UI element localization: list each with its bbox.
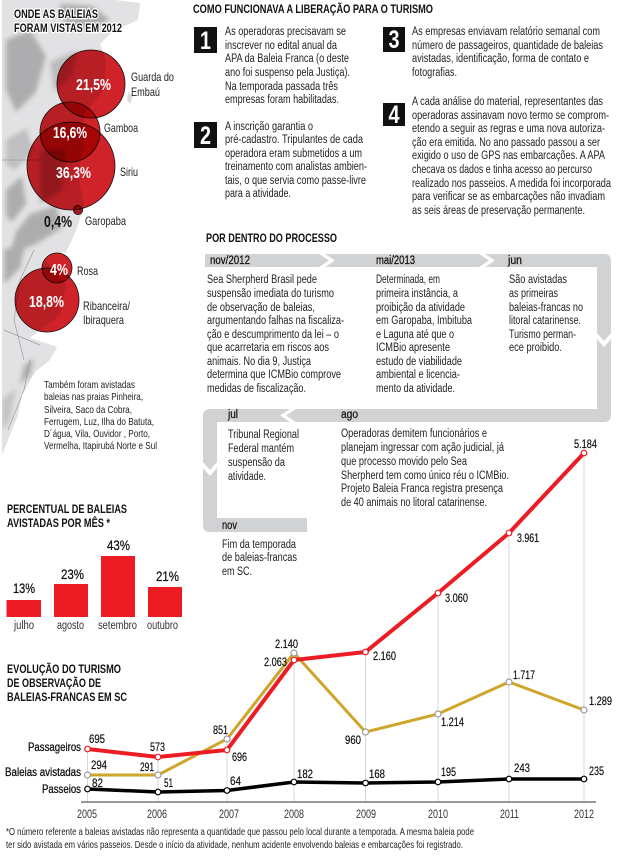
panel: inside the process timeline [203, 231, 611, 578]
values: passageiros: 573 [150, 742, 165, 754]
panel: percentage of whales by month [6, 502, 182, 632]
heading: percentage by month: PERCENTUAL DE BALEIAS [7, 502, 127, 516]
place labels: Rosa [77, 264, 98, 278]
bar: outubro [147, 568, 182, 632]
map background: coast of Santa Catarina [2, 0, 140, 455]
step 2: pré-cadastro. Tripulantes de cada [225, 134, 363, 146]
event: ago: que processo movido pelo Sea [341, 456, 467, 468]
bar: julho: 13% [13, 580, 35, 596]
circle: Rosa [42, 253, 72, 283]
step 1: ano foi suspenso pela Justiça). [225, 67, 350, 79]
step 4 [383, 96, 611, 217]
event: nov: em SC. [222, 566, 252, 578]
heading: percentage by month [7, 502, 127, 530]
event: mai/2013: primeira instância, a [376, 288, 458, 300]
circle values: 18,8% [29, 294, 64, 311]
bar: agosto: agosto [57, 620, 84, 632]
values: baleias avistadas: 2.140 [275, 639, 298, 651]
bar chart [6, 537, 182, 632]
map heading: FORAM VISTAS EM 2012 [14, 21, 122, 35]
place labels: Guarda do [131, 70, 174, 84]
bar: setembro: setembro [98, 620, 137, 632]
step 2: 2 [200, 122, 211, 150]
year axis labels [77, 809, 594, 821]
footnote: ter sido avistada em vários passeios. Desde o início da atividade, nenhum acidente envolvendo baleias e embarcações foi registrado. [6, 839, 463, 851]
map heading [14, 7, 122, 35]
step 2: treinamento com analistas ambien- [225, 161, 367, 173]
series labels [5, 740, 81, 796]
heading: process: POR DENTRO DO PROCESSO [206, 231, 337, 245]
event: jul [227, 409, 299, 483]
circle values: 36,3% [56, 165, 91, 182]
event: jun: São avistadas [509, 274, 567, 286]
event: ago [341, 409, 509, 509]
values: baleias avistadas: 960 [345, 735, 361, 747]
circle values: 16,6% [53, 125, 87, 142]
values: passageiros: 3.060 [445, 593, 468, 605]
map note: Também foram avistadas [44, 379, 135, 391]
values: passageiros [89, 439, 597, 764]
values: baleias avistadas: 1.717 [513, 670, 535, 682]
values: passeios: 51 [164, 778, 173, 790]
event: ago: Sherpherd tem como único réu o ICMBio. [341, 470, 509, 482]
values: baleias avistadas: 1.214 [441, 717, 464, 729]
values: passageiros: 3.961 [517, 533, 539, 545]
step 1: 1 [200, 27, 211, 55]
place labels: Embaú [131, 85, 160, 99]
heading: tourism evolution: DE OBSERVAÇÃO DE [7, 675, 101, 690]
year axis labels: 2005 [77, 809, 97, 821]
step 2: tais, o que servia como passe-livre [225, 175, 366, 187]
footnote [6, 826, 474, 851]
event: ago: ago [341, 409, 358, 421]
values: baleias avistadas: 294 [91, 760, 108, 772]
year axis labels: 2006 [147, 809, 167, 821]
place labels: Gamboa [104, 121, 138, 135]
event: jun: Turismo perman- [509, 329, 576, 341]
heading: licensing: COMO FUNCIONAVA A LIBERAÇÃO PARA O TURISMO [193, 1, 433, 16]
event: mai/2013: Determinada, em [376, 274, 440, 286]
map note: Silveira, Saco da Cobra, [44, 404, 132, 416]
map note: baleias nas praias Pinheira, [44, 391, 143, 403]
values: passageiros: 696 [232, 752, 247, 764]
step 1: Na temporada passada três [225, 81, 338, 93]
event: jul: atividade. [228, 471, 266, 483]
circle: Garopaba [73, 205, 83, 215]
step 2 [194, 121, 367, 200]
values: passeios: 82 [92, 778, 103, 790]
event: jul: Tribunal Regional [228, 429, 299, 441]
event: mai/2013: e Laguna até que o [376, 329, 454, 341]
heading: tourism evolution: BALEIAS-FRANCAS EM SC [7, 690, 127, 704]
map heading: ONDE AS BALEIAS [14, 7, 98, 21]
values: passeios [92, 763, 604, 790]
step 4: 4 [388, 101, 400, 129]
event: mai/2013: mento da atividade. [376, 383, 455, 395]
heading: tourism evolution [7, 661, 127, 704]
year axis labels: 2009 [356, 809, 376, 821]
event: jun: ece proibido. [509, 342, 562, 354]
event: jun: baleias-francas no [509, 302, 583, 314]
line: passageiros [85, 450, 587, 760]
year axis labels: 2008 [284, 809, 304, 821]
circle: Ribanceira/Ibiraquera [15, 268, 79, 332]
line: baleias avistadas [84, 650, 587, 778]
panel: tourism evolution line chart [5, 439, 612, 821]
values: passeios: 168 [369, 769, 385, 781]
step 1: APA da Baleia Franca (o deste [225, 53, 349, 65]
place labels: Ibiraquera [83, 313, 124, 327]
event: mai/2013: mai/2013 [376, 255, 415, 267]
place labels: Garopaba [85, 214, 126, 228]
panel: how the licensing worked [193, 1, 611, 217]
step 2: para a atividade. [225, 188, 291, 200]
circle: Guarda do Embaú [57, 50, 125, 118]
event: ago: de 40 animais no litoral catarinense. [341, 497, 487, 509]
bar: setembro [98, 537, 137, 632]
heading: tourism evolution: EVOLUÇÃO DO TURISMO [7, 661, 121, 676]
bar: outubro: 21% [156, 568, 179, 584]
event: nov: de baleias-francas [222, 552, 297, 564]
bar: agosto: 23% [61, 566, 84, 582]
place labels: Siriu [120, 165, 138, 179]
map note [44, 379, 157, 452]
step 2: A inscrição garantia o [225, 121, 313, 133]
timeline track with arrows [203, 254, 611, 532]
map note: D´água, Vila, Ouvidor , Porto, [44, 428, 150, 440]
event: ago: planejam ingressar com ação judicial, já [341, 442, 504, 454]
series labels: Passeios [42, 782, 81, 796]
grid lines and axis [81, 453, 596, 802]
bar: julho: julho [13, 620, 34, 632]
event: nov/2012: animais. No dia 9, Justiça [207, 356, 311, 368]
event: nov/2012: suspensão imediata do turismo [207, 288, 334, 300]
bar: julho [6, 580, 41, 632]
values: passageiros: 5.184 [574, 439, 597, 451]
circle values: 4% [50, 262, 68, 279]
heading: percentage by month: AVISTADAS POR MÊS * [7, 515, 110, 530]
values: passeios: 195 [441, 767, 456, 779]
event: mai/2013: estudo de viabilidade [376, 356, 462, 368]
event: jun: as primeiras [509, 288, 558, 300]
event: nov: nov [222, 520, 237, 532]
event: mai/2013: ambiental e licencia- [376, 369, 460, 381]
year axis labels: 2012 [574, 809, 594, 821]
step 3 [383, 26, 603, 79]
circle values [29, 77, 111, 311]
year axis labels: 2007 [219, 809, 239, 821]
event: nov/2012: ção e descumprimento da lei – o [207, 329, 339, 341]
values: baleias avistadas: 1.289 [589, 696, 612, 708]
event: mai/2013 [376, 255, 472, 395]
event: nov/2012: nov/2012 [210, 255, 250, 267]
event: mai/2013: em Garopaba, Imbituba [376, 315, 472, 327]
values: baleias avistadas [91, 639, 612, 774]
circle values: 21,5% [76, 77, 111, 94]
place labels [77, 70, 174, 327]
event: nov/2012: que acarretaria em riscos aos [207, 342, 329, 354]
step 1 [194, 26, 350, 106]
step 2: operadora eram submetidos a um [225, 148, 362, 160]
bar: setembro: 43% [107, 537, 130, 553]
event: jul: Federal mantém [228, 443, 294, 455]
event: ago: Projeto Baleia Franca registra presença [341, 483, 503, 495]
year axis labels: 2010 [428, 809, 448, 821]
values: passeios: 182 [297, 769, 313, 781]
event: jul: suspensão da [228, 457, 285, 469]
year axis labels: 2011 [500, 809, 519, 821]
values: passeios: 243 [514, 763, 530, 775]
event: nov: Fim da temporada [222, 539, 296, 551]
event: nov/2012 [207, 255, 344, 395]
circle: Gamboa [40, 102, 100, 162]
circle values: 0,4% [44, 214, 72, 231]
series labels: Passageiros [28, 740, 81, 754]
event: nov/2012: medidas de fiscalização. [207, 383, 306, 395]
step 3: fotografias. [412, 67, 457, 79]
bar: agosto [54, 566, 88, 632]
place labels: Ribanceira/ [83, 299, 131, 313]
event: nov/2012: argumentando falhas na fiscaliza- [207, 315, 344, 327]
series labels: Baleias avistadas [5, 765, 81, 779]
event: ago: Operadoras demitem funcionários e [341, 428, 487, 440]
values: passeios: 64 [230, 776, 242, 788]
event: nov/2012: de observação de baleias, [207, 302, 315, 314]
line: passeios [85, 776, 587, 795]
values: baleias avistadas: 851 [213, 725, 228, 737]
step 1: inscrever no edital anual da [225, 40, 337, 52]
event: nov/2012: determina que ICMBio comprove [207, 369, 341, 381]
values: passageiros: 2.063 [264, 657, 287, 669]
event: nov [222, 520, 297, 578]
values: passageiros: 2.160 [373, 651, 396, 663]
event: jun: jun [507, 255, 522, 267]
circle: Siriu [27, 122, 115, 210]
panel: whale sighting map [2, 0, 174, 455]
map note: Ferrugem, Luz, Ilha do Batuta, [44, 416, 154, 428]
step 3: 3 [388, 26, 400, 54]
step 1: As operadoras precisavam se [225, 26, 346, 38]
event: jun: litoral catarinense. [509, 315, 581, 327]
values: baleias avistadas: 291 [140, 762, 154, 774]
values: passeios: 235 [589, 766, 604, 778]
step 1: empresas foram habilitadas. [225, 94, 339, 106]
map note: Vermelha, Itapirubá Norte e Sul [44, 440, 157, 452]
bar: outubro: outubro [147, 620, 178, 632]
event: nov/2012: Sea Sherpherd Brasil pede [207, 274, 317, 286]
values: passageiros: 695 [89, 734, 105, 746]
event: mai/2013: ICMBio apresente [376, 342, 450, 354]
event: jun [507, 255, 583, 354]
event: mai/2013: proibição da atividade [376, 302, 465, 314]
event: jul: jul [227, 409, 238, 421]
